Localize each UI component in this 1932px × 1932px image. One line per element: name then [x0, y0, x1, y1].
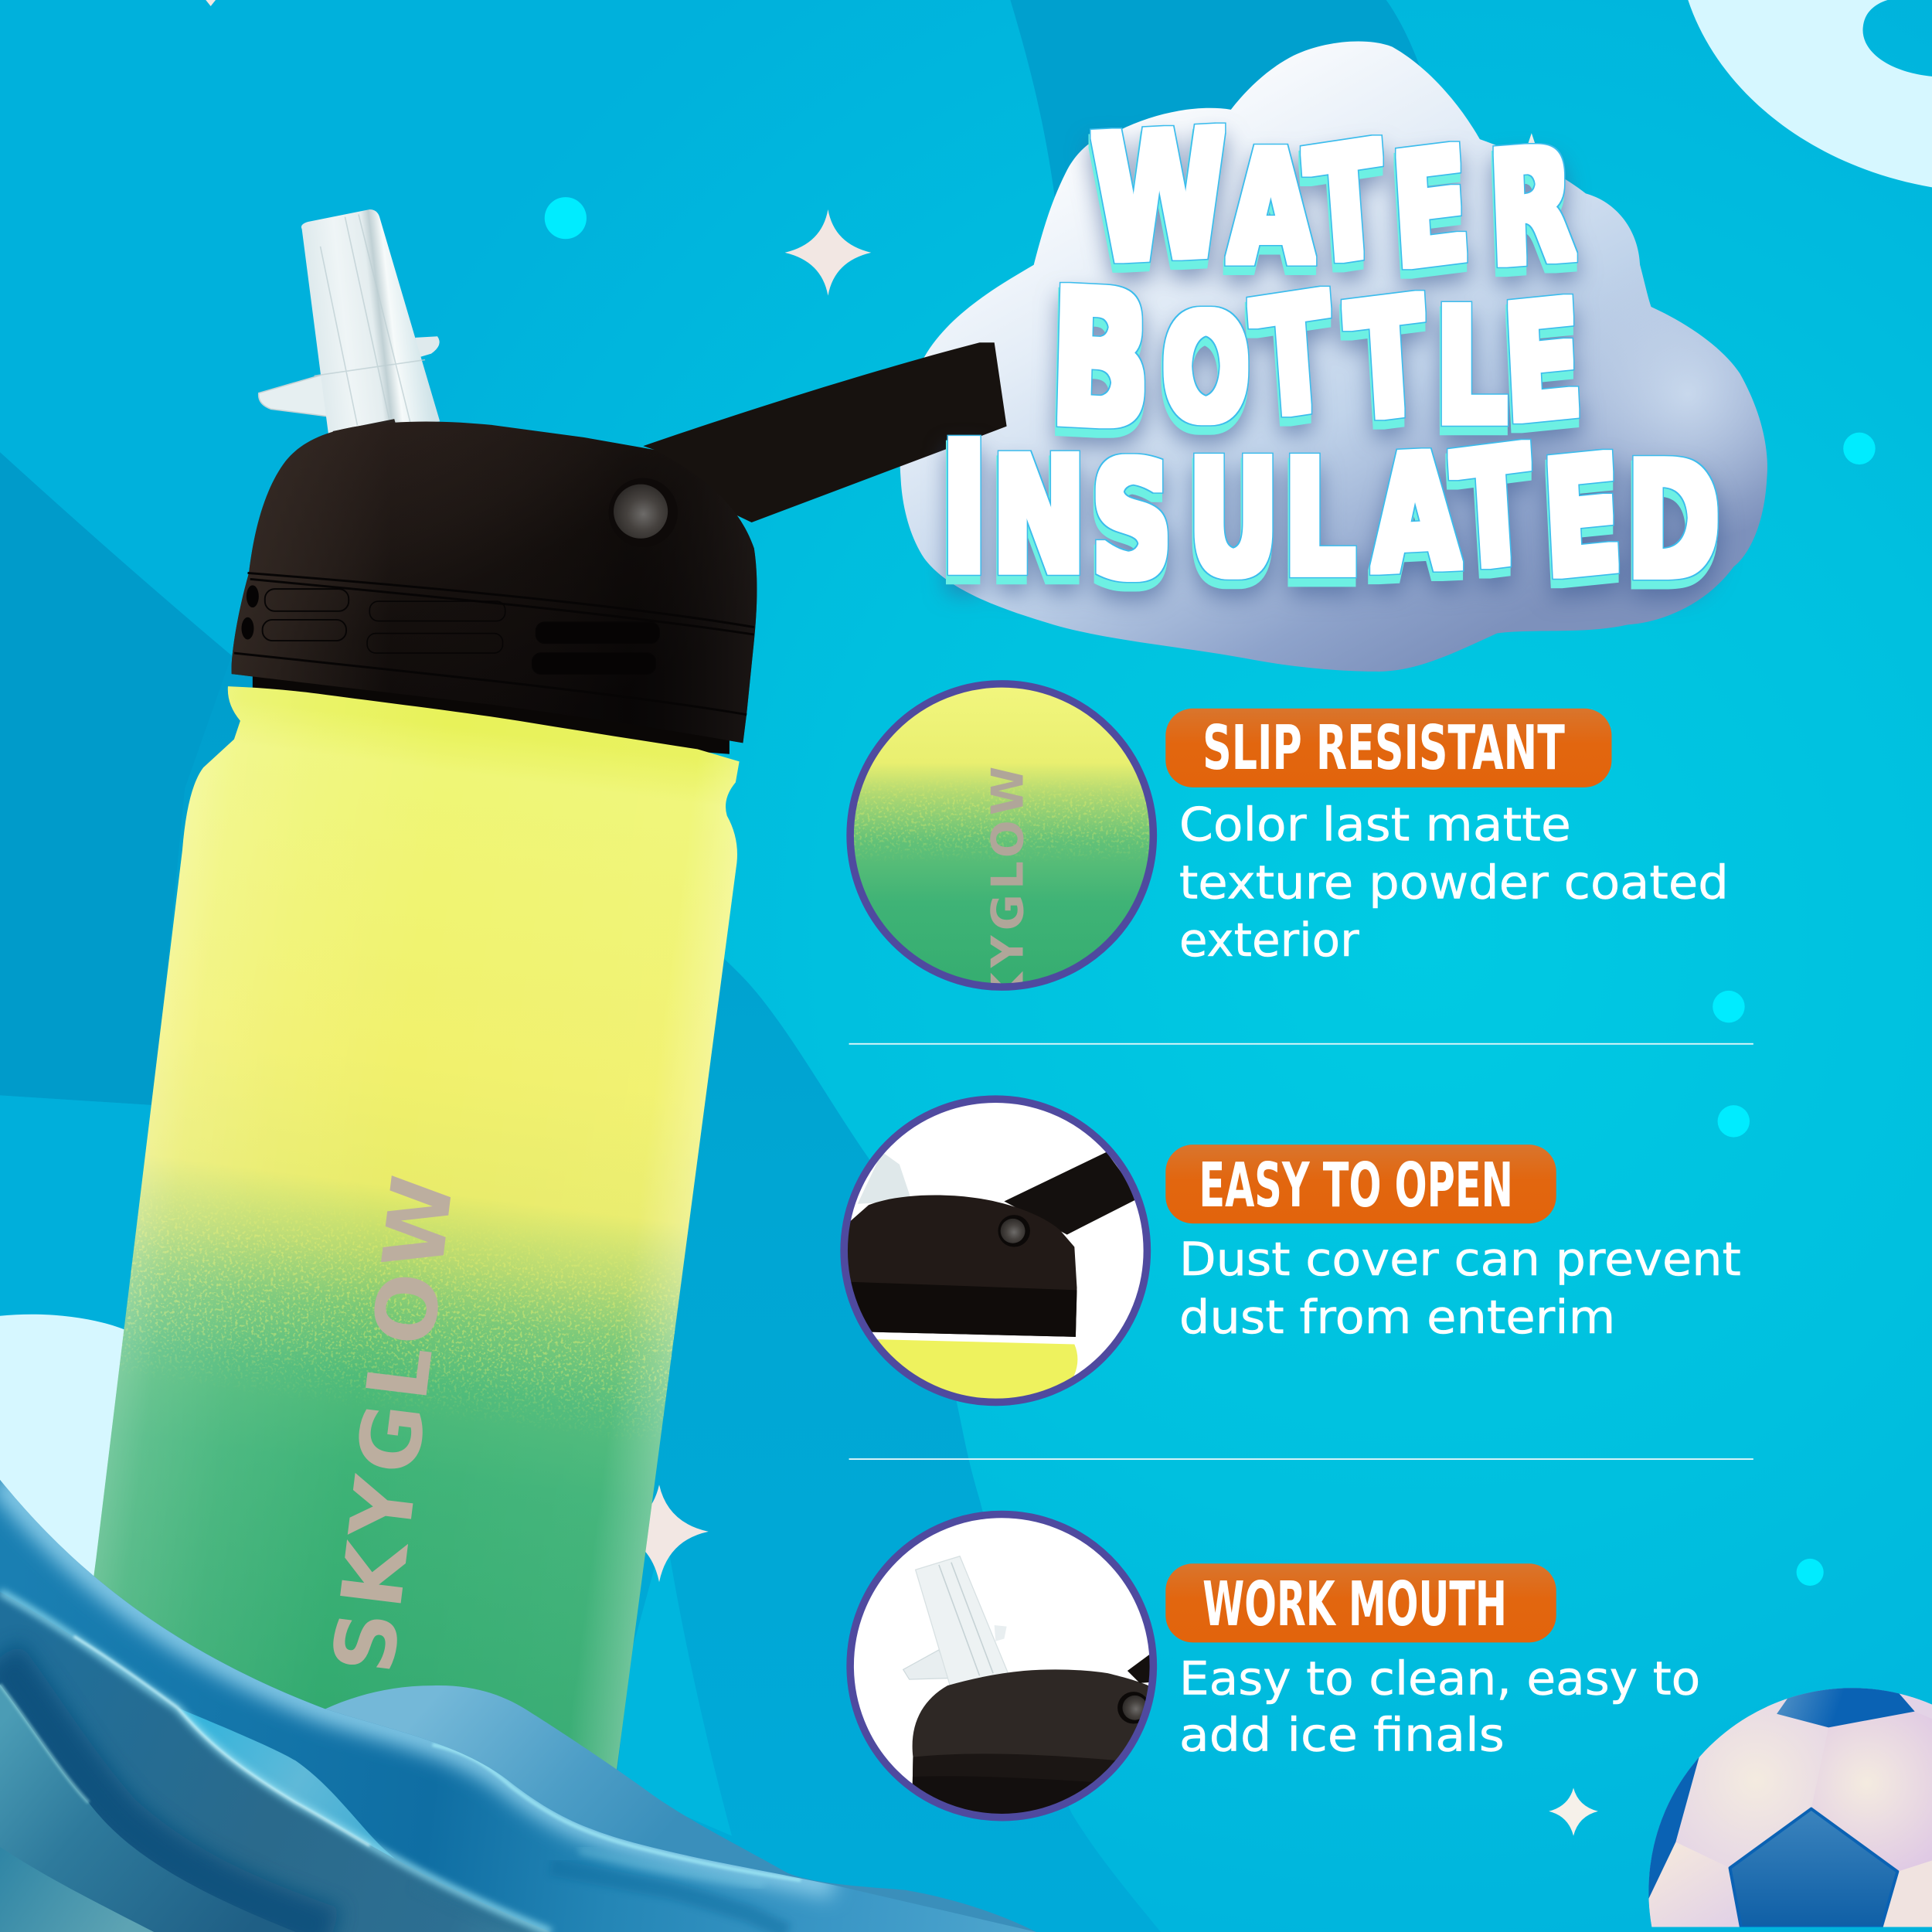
front band highlight	[0, 1480, 834, 1885]
badge: easy to open	[1165, 1145, 1556, 1223]
title line: insulated: NSULATED	[993, 413, 1719, 613]
cloud behind title	[900, 41, 1836, 672]
main ridge glow	[0, 1592, 551, 1932]
feature: slip resistant	[849, 684, 1753, 1045]
divider: after slip resistant	[849, 1043, 1753, 1045]
ball panel: left crescent	[1639, 1757, 1699, 1899]
description: work mouth: add ice finals	[1179, 1709, 1505, 1763]
bottle body	[94, 686, 740, 1770]
feature: easy to open	[838, 1099, 1753, 1460]
swirl: area under band	[0, 1095, 154, 1343]
title line: bottle: O	[1162, 284, 1249, 454]
title line: water: ATER	[1229, 109, 1577, 303]
swirl: band left of bottle	[0, 452, 232, 1105]
soccer ball	[1639, 1682, 1932, 1927]
description: work mouth	[1179, 1652, 1700, 1763]
bottle brand text: SKYGLOW	[315, 1171, 473, 1679]
sparkle stars	[206, 0, 1598, 1836]
third fold	[0, 1847, 154, 1932]
circle image: gradient close-up	[850, 684, 1153, 1043]
cap pivot pin	[609, 478, 678, 547]
ball panel: top pentagon	[1777, 1682, 1915, 1727]
second ridge glow	[0, 1685, 89, 1803]
bottle	[49, 209, 1007, 1787]
title line: water: W	[1090, 94, 1229, 301]
description: work mouth: Easy to clean, easy to	[1179, 1652, 1700, 1706]
ball panel: centre pentagon	[1730, 1809, 1897, 1927]
description: easy to open: Dust cover can prevent	[1179, 1233, 1741, 1287]
description: easy to open	[1179, 1233, 1741, 1345]
waves	[0, 1480, 1036, 1932]
handle	[643, 342, 1007, 522]
swirl: left dark blue arc	[0, 655, 1161, 1932]
decorative dots	[545, 197, 1876, 1586]
back wave	[325, 1685, 1036, 1932]
divider: after easy to open	[849, 1458, 1753, 1460]
swirl: lighter wedge right of bottle	[616, 1528, 732, 1836]
circle image: gradient close-up: SKYGLOW	[981, 767, 1033, 1043]
badge: work mouth	[1165, 1563, 1556, 1642]
ball panel: lower left	[1648, 1842, 1741, 1927]
title	[941, 94, 1719, 614]
lower fold	[0, 1592, 551, 1932]
swirl: top dark blue	[1010, 0, 1423, 216]
dark shade above second ridge	[0, 1657, 332, 1932]
title line: insulated: I	[941, 406, 988, 614]
description: slip resistant: Color last matte	[1179, 798, 1571, 852]
feature: work mouth	[850, 1515, 1700, 1824]
badge: work mouth: WORK MOUTH	[1202, 1568, 1507, 1640]
front wave band	[0, 1480, 1036, 1932]
title line: bottle: B	[1049, 250, 1152, 470]
main ridge highlight	[74, 1636, 369, 1845]
circle image: bottle cap	[838, 1099, 1147, 1411]
description: easy to open: dust from enterim	[1179, 1291, 1615, 1345]
cap	[232, 421, 757, 743]
title line: bottle: TTLE	[1249, 260, 1585, 459]
swirl: pale shape top right	[1688, 0, 1932, 187]
light patch	[178, 1708, 425, 1885]
right inner fold	[551, 1866, 787, 1932]
ball panel: lower right	[1882, 1861, 1932, 1927]
badge: slip resistant	[1165, 709, 1611, 787]
description: slip resistant: texture powder coated	[1179, 856, 1729, 910]
bottle neck shadow	[253, 675, 730, 754]
cap grip ridges	[234, 573, 754, 715]
shade under first ridge	[414, 1885, 530, 1932]
description: slip resistant	[1179, 798, 1729, 968]
straw	[259, 209, 440, 439]
circle image: straw	[850, 1515, 1158, 1824]
swirl: pale shape left	[0, 1315, 124, 1639]
badge: easy to open: EASY TO OPEN	[1199, 1149, 1513, 1221]
description: slip resistant: exterior	[1179, 914, 1359, 968]
badge: slip resistant: SLIP RESISTANT	[1202, 712, 1565, 784]
second fold	[0, 1685, 296, 1932]
